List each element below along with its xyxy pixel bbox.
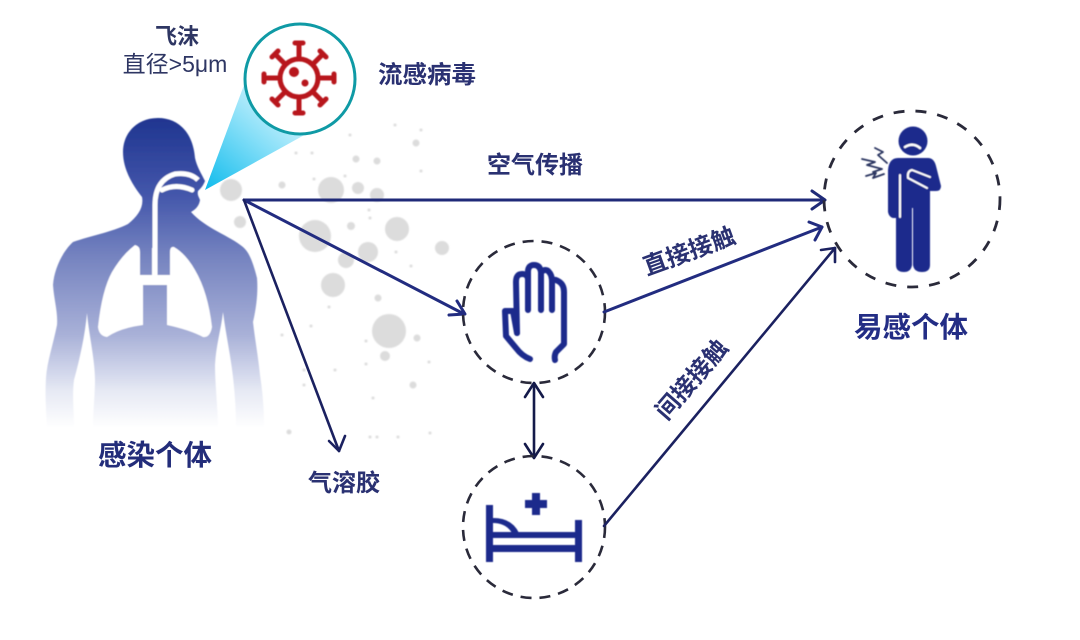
droplet label: 飞沫: [155, 24, 199, 49]
arrow: direct contact: [604, 222, 822, 312]
arrow: two-way contact to bed: [525, 383, 543, 458]
label: influenza virus: 流感病毒: [378, 60, 476, 89]
droplets cloud: [220, 124, 449, 438]
circle: contaminated bed: [463, 456, 605, 598]
airway: [155, 174, 198, 277]
label: susceptible individual: 易感个体: [854, 312, 968, 344]
label: infected individual: 感染个体: [98, 440, 212, 472]
lungs: [98, 245, 212, 337]
circle: susceptible person: [824, 111, 1000, 287]
icon: coughing person: [862, 126, 941, 272]
label: direct contact: 直接接触: [640, 223, 739, 281]
arrow: aerosol: [244, 200, 345, 451]
label: aerosol: 气溶胶: [308, 470, 380, 497]
droplet label: [123, 24, 227, 77]
label: airborne transmission: 空气传播: [487, 152, 583, 179]
icon: medical bed: [486, 493, 582, 562]
arrow: airborne: [244, 191, 825, 209]
mouth cavity: [162, 186, 192, 190]
icon: virus: [264, 43, 334, 113]
label: indirect contact: 间接接触: [651, 335, 734, 425]
magnifier cone: [205, 85, 308, 190]
circle: hand contact: [463, 241, 605, 383]
magnified virus badge: [245, 24, 355, 134]
body with gradient: [46, 118, 264, 428]
icon: hand: [505, 265, 564, 360]
arrow: indirect contact: [604, 248, 835, 526]
infected person silhouette: [46, 118, 264, 428]
droplet label: 直径>5μm: [123, 51, 227, 77]
arrow: to contact surface: [244, 200, 465, 315]
